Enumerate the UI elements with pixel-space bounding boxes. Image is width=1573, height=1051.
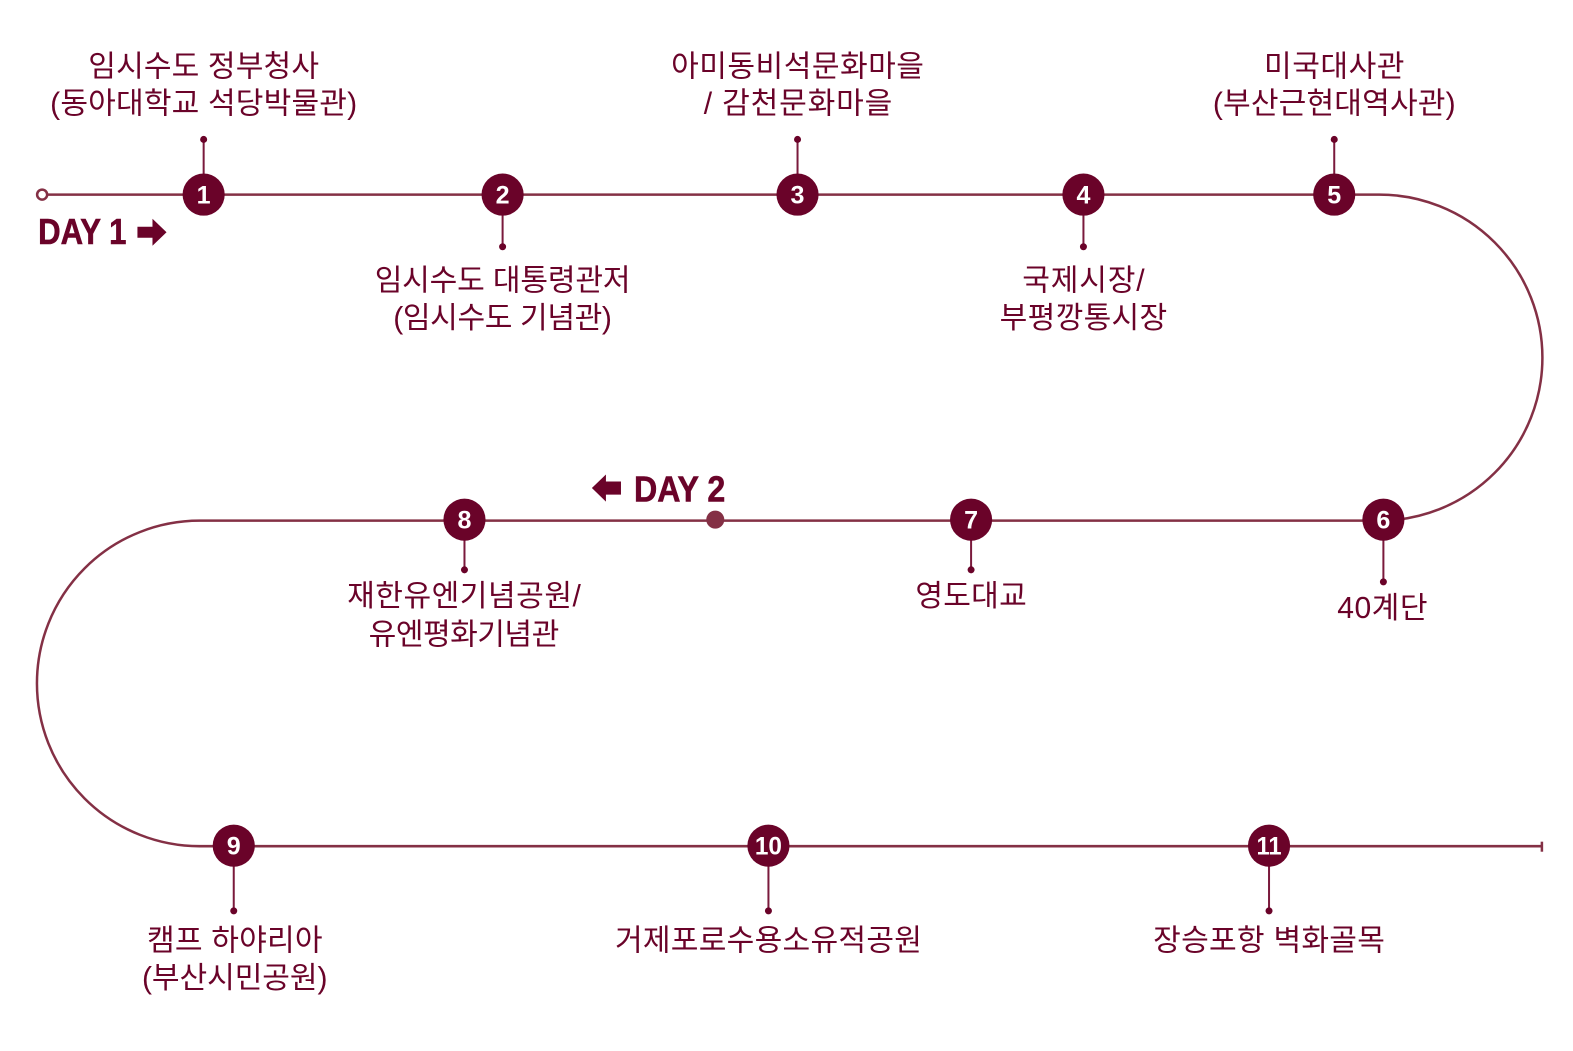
stop 4 (1000, 174, 1167, 335)
stop 8: 8 (458, 507, 472, 535)
stop 3: 3 (791, 182, 805, 210)
stop 5: (부산근현대역사관) (1213, 87, 1456, 120)
stop 3 (671, 51, 924, 216)
icon: left arrow (592, 475, 621, 502)
stop 2 (375, 174, 631, 335)
stop 1: 1 (197, 182, 211, 210)
stop 5: 미국대사관 (1264, 51, 1404, 84)
stop 10: 거제포로수용소유적공원 (615, 925, 922, 958)
stop 2: 임시수도 대통령관저 (375, 264, 631, 297)
day 2 start marker (706, 511, 724, 529)
stop 2: 2 (496, 182, 510, 210)
stop 9: 9 (227, 833, 241, 861)
stop 4: 4 (1076, 182, 1090, 210)
stop 4: 국제시장/ (1022, 264, 1145, 297)
stop 7: 7 (964, 507, 978, 535)
stop 9 (142, 825, 328, 995)
stop 1 (50, 51, 357, 216)
stop 3: 아미동비석문화마을 (671, 51, 924, 84)
day 2 label (592, 469, 725, 510)
stop 4: 부평깡통시장 (1000, 302, 1167, 335)
stop 10 (615, 825, 922, 958)
stop 8: 재한유엔기념공원/ (347, 580, 581, 613)
stop 3: / 감천문화마을 (704, 87, 892, 120)
stop 2: (임시수도 기념관) (393, 302, 612, 335)
stop 5: 5 (1327, 182, 1341, 210)
stop 11: 장승포항 벽화골목 (1153, 925, 1385, 958)
stop 8: 유엔평화기념관 (369, 619, 559, 652)
stop 6: 40계단 (1337, 592, 1428, 625)
day 1 label: DAY 1 (38, 211, 126, 252)
stop 11 (1153, 825, 1385, 958)
stop 9: 캠프 하야리아 (147, 925, 323, 958)
stop 6: 6 (1376, 507, 1390, 535)
stop 10: 10 (755, 833, 782, 861)
stop 6 (1337, 499, 1428, 625)
stop 1: 임시수도 정부청사 (88, 51, 319, 84)
route line (37, 195, 1542, 846)
stop 7: 영도대교 (915, 580, 1027, 613)
icon: right arrow (137, 219, 167, 246)
route start marker (37, 190, 47, 200)
stop 7 (915, 499, 1027, 613)
stop 5 (1213, 51, 1456, 216)
stop 1: (동아대학교 석당박물관) (50, 87, 357, 120)
stop 11: 11 (1256, 833, 1282, 861)
stop 8 (347, 499, 581, 652)
stop 9: (부산시민공원) (142, 962, 328, 995)
route end marker (1541, 842, 1543, 852)
day 2 label: DAY 2 (634, 469, 725, 510)
